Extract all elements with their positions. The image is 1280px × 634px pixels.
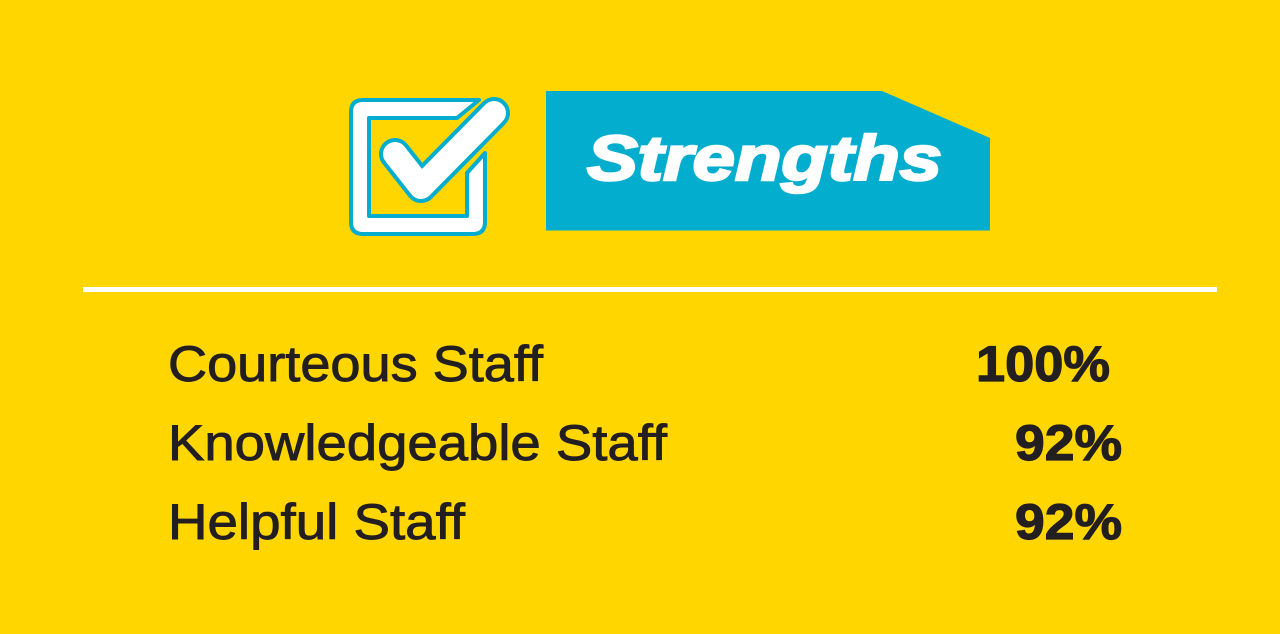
icon: checkbox with check mark [351,100,494,234]
row: Helpful Staff: Helpful Staff [168,494,465,550]
row: Courteous Staff [168,336,1110,392]
row: Helpful Staff [168,494,1122,550]
row: Courteous Staff: 100% [976,336,1110,392]
heading banner: Strengths [546,91,990,230]
row: Courteous Staff: Courteous Staff [168,336,543,392]
row: Knowledgeable Staff: Knowledgeable Staff [168,415,667,471]
row: Knowledgeable Staff: 92% [1015,415,1122,471]
heading banner: Strengths: Strengths [587,124,942,194]
row: Knowledgeable Staff [168,415,1122,471]
row: Helpful Staff: 92% [1015,494,1122,550]
divider [83,287,1217,292]
